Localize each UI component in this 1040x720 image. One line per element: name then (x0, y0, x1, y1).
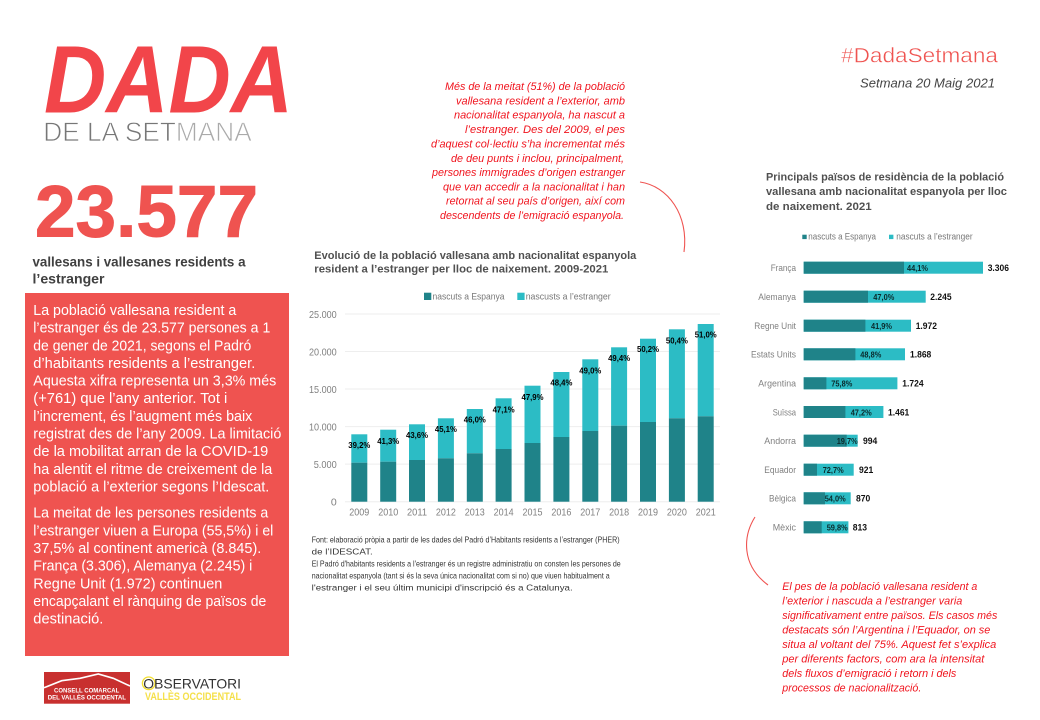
y axis labels: 20.000 (309, 346, 337, 358)
data labels: 48,4% (550, 378, 573, 388)
data labels: 49,0% (579, 365, 602, 375)
data labels: 49,4% (608, 353, 630, 363)
callout: top note: l’estranger. Des del 2009, el pes (465, 124, 625, 136)
callout: bottom note: dels fluxos d’emigració i retorn i dels (782, 668, 957, 680)
panel: main text: ha alentit el ritme de creixement de la (33, 461, 273, 478)
headline number: vallesans i vallesanes residents a (32, 254, 246, 270)
percent labels: 54,0% (825, 494, 846, 504)
y axis labels (309, 309, 337, 509)
value labels (853, 263, 1009, 534)
data labels: 47,1% (493, 404, 515, 414)
callout: bottom note: situa al voltant del 75%. Aquest fet s’explica (782, 639, 996, 651)
logo: Observatori: VALLÈS OCCIDENTAL (145, 690, 241, 703)
legend: evolution chart: nascuts a Espanya (432, 292, 505, 302)
logo: Consell Comarcal: DEL VALLÈS OCCIDENTAL (48, 692, 126, 701)
percent labels: 41,9% (871, 321, 892, 331)
callout: top note: d’aquest col·lectiu s’ha incrementat més (431, 138, 625, 150)
headline number: l’estranger (32, 270, 105, 286)
hashtag and date: Setmana 20 Maig 2021 (860, 75, 995, 90)
panel: main text: l’increment, és l’augment més baix (33, 408, 253, 425)
x axis labels: 2019 (638, 507, 658, 519)
callout: bottom note (781, 581, 998, 695)
callout: top note: retornat al seu país d’origen, així com (446, 196, 625, 208)
panel: main text: Aquesta xifra representa un 3,3% més (33, 373, 276, 390)
callout: top note: vallesana resident a l’exterior, amb (456, 95, 625, 107)
heading: countries chart: Principals països de residència de la població (766, 172, 1004, 184)
x axis labels: 2018 (609, 507, 629, 519)
panel: main text: població a l’exterior segons l’Idescat. (33, 478, 269, 495)
data labels: 47,9% (522, 392, 544, 402)
y axis labels: 5.000 (314, 459, 337, 471)
percent labels: 48,8% (860, 350, 882, 360)
y axis labels: 10.000 (309, 422, 337, 434)
hashtag and date: #DadaSetmana (841, 45, 998, 68)
source note: l'estranger i el seu últim municipi d'inscripció és a Catalunya. (312, 582, 573, 592)
data labels: 41,3% (377, 436, 400, 446)
legend: evolution chart (424, 292, 611, 302)
panel: main text: La meitat de les persones residents a (33, 505, 269, 522)
percent labels: 44,1% (907, 263, 928, 273)
country labels (751, 263, 797, 534)
bar chart: countries 2021 (751, 232, 1009, 534)
percent labels: 72,7% (823, 465, 844, 475)
callout: bottom note: significativament entre països. Els casos més (782, 610, 998, 622)
percent labels: 47,2% (851, 407, 872, 417)
data labels: 46,0% (464, 415, 486, 425)
panel: main text: l’estranger és de 23.577 persones a 1 (33, 320, 270, 337)
data labels: 39,2% (348, 440, 371, 450)
x axis labels: 2011 (407, 507, 427, 519)
callout: bottom note: destacats són l’Argentina i l’Equador, on se (782, 624, 990, 636)
source note (312, 534, 621, 592)
panel: main text: (+761) que l’any anterior. Tot i (33, 390, 227, 407)
legend: countries chart: nascuts a l’estranger (896, 232, 973, 242)
headline number (32, 172, 258, 286)
callout: top note (431, 81, 626, 222)
x axis labels: 2021 (696, 507, 716, 519)
x axis labels: 2012 (436, 507, 456, 519)
heading: countries chart (766, 172, 1007, 213)
headline number: 23.577 (35, 172, 258, 253)
y axis labels: 0 (331, 497, 337, 509)
x axis labels: 2013 (465, 507, 485, 519)
panel: main text: de la mobilitat arran de la COVID-19 (33, 443, 268, 460)
stacked bars (351, 324, 714, 502)
y axis labels: 25.000 (309, 309, 337, 321)
callout: bottom note: processos de nacionalització. (781, 683, 921, 695)
panel: main text: Regne Unit (1.972) continuen (33, 575, 222, 592)
logo: Consell Comarcal: CONSELL COMARCAL (54, 687, 119, 694)
y axis labels: 15.000 (309, 384, 337, 396)
heading: countries chart: vallesana amb nacionalitat espanyola per lloc (766, 186, 1007, 198)
callout: top note: que van accedir a la nacionalitat i han (443, 182, 625, 194)
country labels: Equador (764, 465, 796, 476)
legend: evolution chart: nascusts a l’estranger (526, 292, 611, 302)
callout: bottom note: El pes de la població vallesana resident a (782, 581, 977, 593)
source note: El Padró d'habitants residents a l'estranger és un registre administratiu on consten les persones de (312, 558, 621, 568)
data labels: 43,6% (406, 430, 428, 440)
title: DADA de la setmana: DE LA SETMANA (43, 117, 252, 147)
data labels: 45,1% (435, 424, 457, 434)
legend: countries chart: nascuts a Espanya (808, 232, 876, 242)
arrow: bottom curve (747, 517, 768, 585)
heading: evolution chart (314, 250, 637, 276)
source note: nacionalitat espanyola (tant si és la seva única nacionalitat com si no) que viuen habitualment a (312, 570, 610, 580)
bar chart: evolution 2009-2021 (309, 292, 720, 519)
panel: main text: encapçalant el rànquing de països de (33, 593, 266, 610)
panel: main text: l’estranger viuen a Europa (55,5%) i el (33, 522, 273, 539)
callout: top note: nacionalitat espanyola, ha nascut a (454, 110, 625, 122)
value labels: 1.724 (902, 379, 924, 390)
country labels: Alemanya (758, 292, 797, 303)
value labels: 1.461 (888, 407, 910, 418)
callout: top note: descendents de l’emigració espanyola. (440, 210, 624, 222)
value labels: 2.245 (930, 292, 952, 303)
heading: countries chart: de naixement. 2021 (766, 201, 872, 213)
source note: de l’IDESCAT. (312, 546, 373, 556)
x axis labels: 2016 (551, 507, 572, 519)
x axis labels (349, 507, 716, 519)
x axis labels: 2020 (667, 507, 687, 519)
arrow: top curve (640, 182, 685, 252)
panel: main text (25, 293, 289, 656)
value labels: 870 (856, 494, 870, 505)
logo: Consell Comarcal (44, 672, 130, 704)
logo: Observatori (142, 675, 241, 703)
x axis labels: 2014 (494, 507, 514, 519)
value labels: 1.868 (910, 350, 931, 361)
panel: main text: 37,5% al continent americà (8.845). (33, 540, 261, 557)
percent labels: 47,0% (873, 292, 895, 302)
x axis labels: 2010 (378, 507, 398, 519)
value labels: 3.306 (988, 263, 1009, 274)
country labels: Estats Units (751, 350, 796, 361)
country labels: Bèlgica (769, 494, 797, 505)
heading: evolution chart: Evolució de la població vallesana amb nacionalitat espanyola (314, 250, 637, 262)
percent labels: 19,7% (837, 436, 858, 446)
value labels: 994 (863, 436, 878, 447)
value labels: 1.972 (916, 321, 937, 332)
data labels: 51,0% (695, 330, 717, 340)
callout: top note: Més de la meitat (51%) de la població (445, 81, 625, 93)
value labels: 921 (859, 465, 874, 476)
logo: Observatori: OBSERVATORI (143, 675, 241, 691)
callout: top note: persones immigrades d’origen estranger (431, 167, 626, 179)
percent labels: 59,8% (827, 523, 848, 533)
panel: main text: França (3.306), Alemanya (2.245) i (33, 558, 252, 575)
horizontal bars (804, 262, 983, 533)
country labels: Suïssa (773, 407, 797, 418)
country labels: Regne Unit (754, 321, 796, 332)
legend: countries chart (802, 232, 973, 242)
country labels: Mèxic (773, 523, 796, 534)
x axis labels: 2015 (522, 507, 543, 519)
panel: main text: de gener de 2021, segons el Padró (33, 337, 251, 354)
title: DADA de la setmana: DADA (44, 26, 293, 134)
x axis labels: 2017 (580, 507, 600, 519)
country labels: Andorra (764, 436, 797, 447)
country labels: Argentina (758, 379, 797, 390)
heading: evolution chart: resident a l’estranger per lloc de naixement. 2009-2021 (314, 264, 608, 276)
callout: top note: de deu punts i inclou, principalment, (451, 153, 624, 165)
panel: main text: d’habitants residents a l’estranger. (33, 355, 255, 372)
x axis labels: 2009 (349, 507, 369, 519)
source note: Font: elaboració pròpia a partir de les dades del Padró d’Habitants residents a l’estranger (PHER) (312, 534, 620, 544)
data labels (348, 330, 717, 450)
panel: main text: La població vallesana resident a (33, 302, 237, 319)
panel: main text: destinació. (33, 610, 103, 628)
callout: bottom note: per diferents factors, com ara la intensitat (781, 653, 985, 665)
percent labels: 75,8% (831, 379, 853, 389)
country labels: França (771, 263, 797, 274)
data labels: 50,2% (637, 344, 659, 354)
percent labels (823, 263, 928, 533)
callout: bottom note: l’exterior i nascuda a l’estranger varia (782, 595, 962, 607)
data labels: 50,4% (666, 336, 688, 346)
panel: main text: registrat des de l’any 2009. La limitació (33, 426, 281, 442)
hashtag and date (841, 45, 998, 90)
value labels: 813 (853, 523, 867, 534)
